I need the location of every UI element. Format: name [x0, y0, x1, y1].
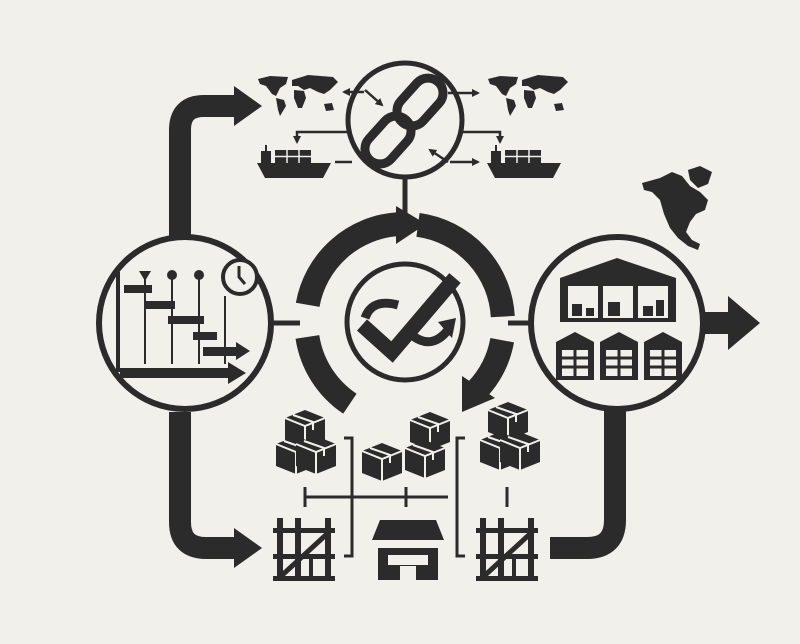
panel: center cycle — [307, 206, 503, 412]
icon: north america — [642, 166, 712, 250]
distribution network — [273, 402, 540, 581]
panel: planning gantt — [99, 237, 271, 409]
panel: warehouse — [531, 237, 703, 409]
arrow: right bottom flow — [550, 410, 615, 548]
arrow: left bottom flow — [180, 412, 262, 568]
arrow: left top flow — [180, 86, 262, 236]
panel: top chain link — [348, 63, 462, 177]
icon: world maps and ships — [257, 75, 568, 178]
arrow: right output — [700, 296, 760, 350]
connectors — [272, 178, 530, 323]
